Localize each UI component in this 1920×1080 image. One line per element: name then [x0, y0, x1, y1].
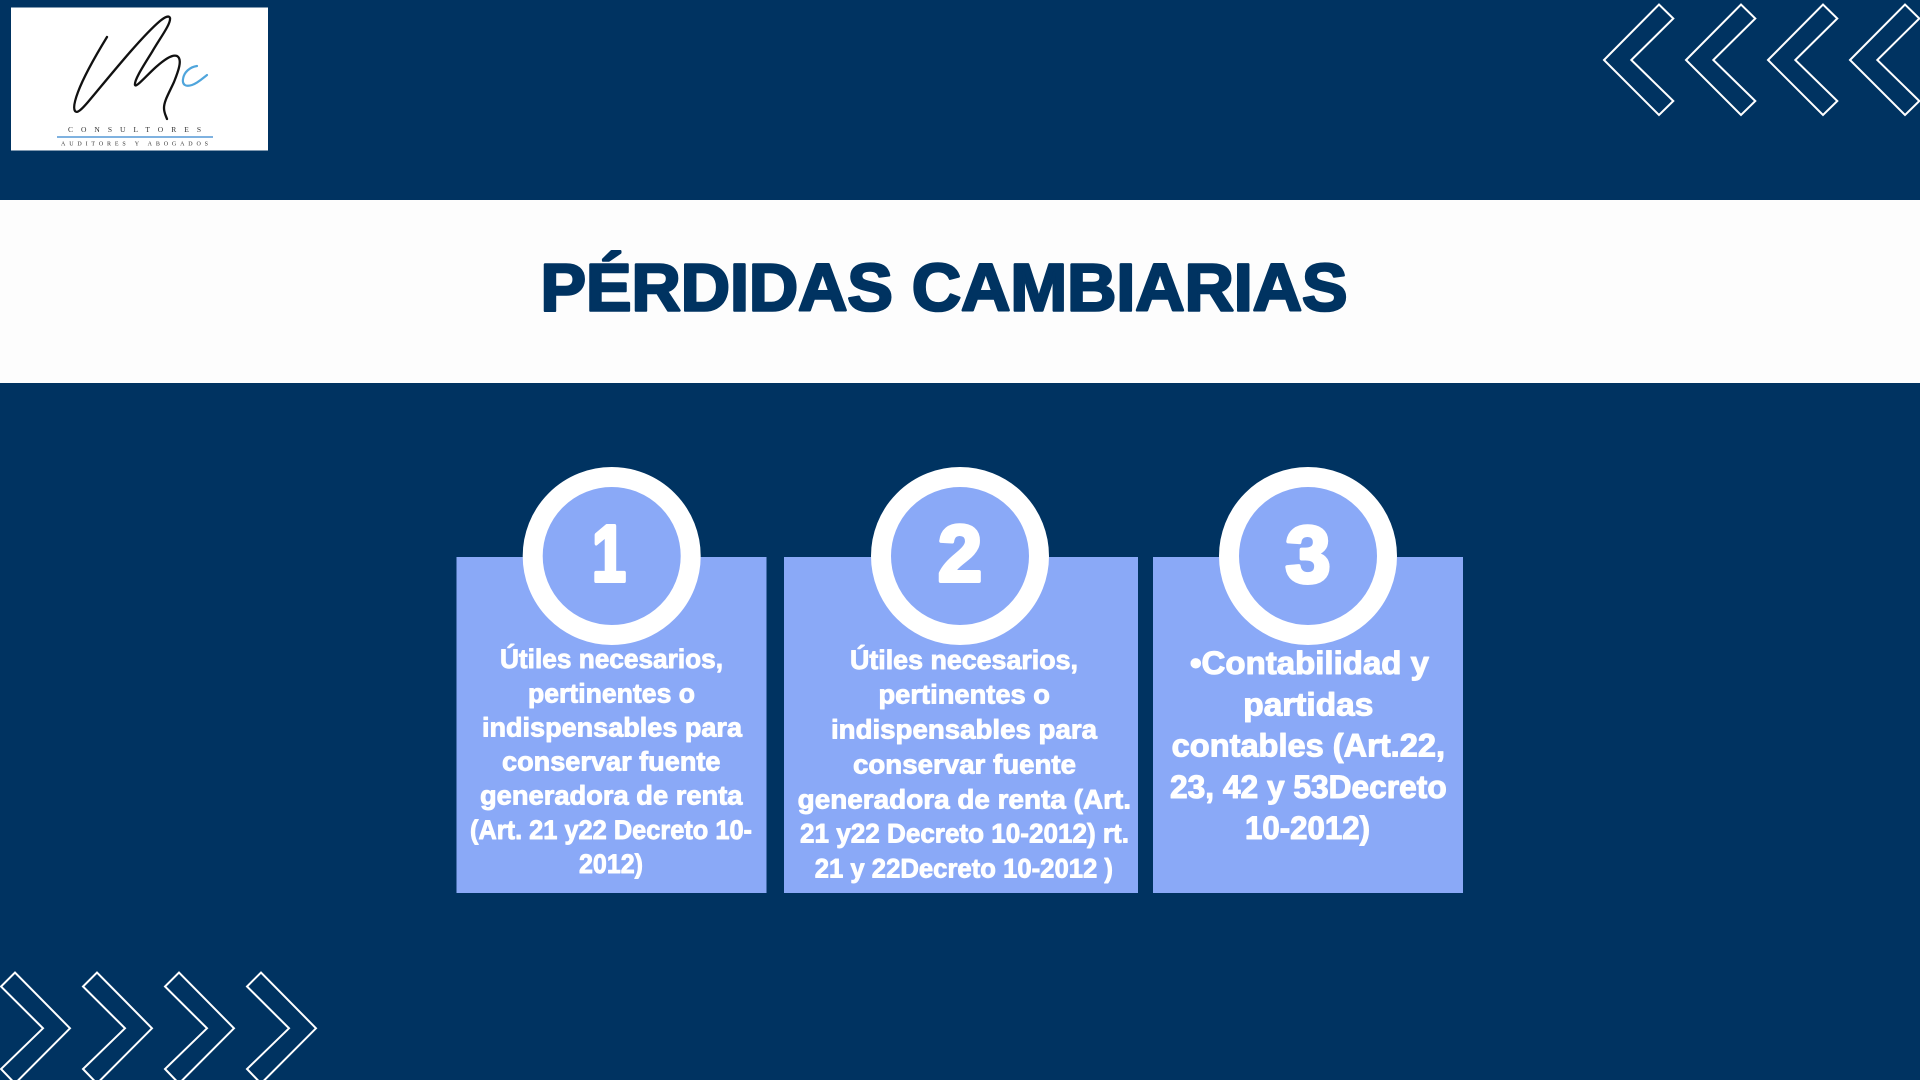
card 2 text: conservar fuente: [853, 750, 1076, 780]
badge: number 2: 2: [938, 509, 982, 598]
card 3 text: 10-2012): [1245, 810, 1370, 846]
card 1 text: (Art. 21 y22 Decreto 10-: [470, 815, 752, 845]
card 1 text: conservar fuente: [502, 746, 720, 776]
card 3 text: contables (Art.22,: [1172, 728, 1445, 764]
card 1 text: [470, 643, 752, 879]
card 2 text: [798, 644, 1131, 884]
card 3 text: 23, 42 y 53Decreto: [1170, 769, 1447, 805]
card 2 text: pertinentes o: [878, 680, 1050, 710]
decorative chevrons: top right: [1604, 4, 1919, 115]
logo: MC Consultores: [11, 8, 268, 150]
logo: MC Consultores: AUDITORES Y ABOGADOS: [61, 142, 208, 148]
card 3 text: [1170, 645, 1447, 846]
card 2 text: indispensables para: [831, 714, 1098, 744]
card 1 text: 2012): [579, 849, 643, 879]
panel: card 3: [1153, 477, 1463, 893]
card 1 text: indispensables para: [482, 712, 743, 742]
card 1 text: Útiles necesarios,: [500, 643, 723, 674]
badge: number 2: [881, 477, 1039, 635]
badge: number 3: [1229, 477, 1387, 635]
badge: number 1: 1: [592, 509, 626, 598]
badge: number 1: [533, 477, 691, 635]
badge: number 3: 3: [1286, 510, 1330, 599]
panel: card 1: [456, 477, 766, 893]
card 2 text: generadora de renta (Art.: [798, 784, 1131, 814]
card 2 text: Útiles necesarios,: [850, 644, 1078, 675]
card 1 text: generadora de renta: [480, 780, 743, 810]
title band: PÉRDIDAS CAMBIARIAS: [540, 250, 1348, 326]
card 3 text: •Contabilidad y: [1190, 645, 1429, 681]
title band: [0, 200, 1920, 383]
card 3 text: partidas: [1243, 686, 1373, 722]
card 2 text: 21 y22 Decreto 10-2012) rt.: [800, 818, 1129, 848]
decorative chevrons: bottom left: [1, 972, 316, 1080]
card 2 text: 21 y 22Decreto 10-2012 ): [815, 854, 1113, 884]
card 1 text: pertinentes o: [528, 678, 695, 708]
logo: MC Consultores: CONSULTORES: [68, 125, 201, 134]
panel: card 2: [784, 477, 1138, 893]
